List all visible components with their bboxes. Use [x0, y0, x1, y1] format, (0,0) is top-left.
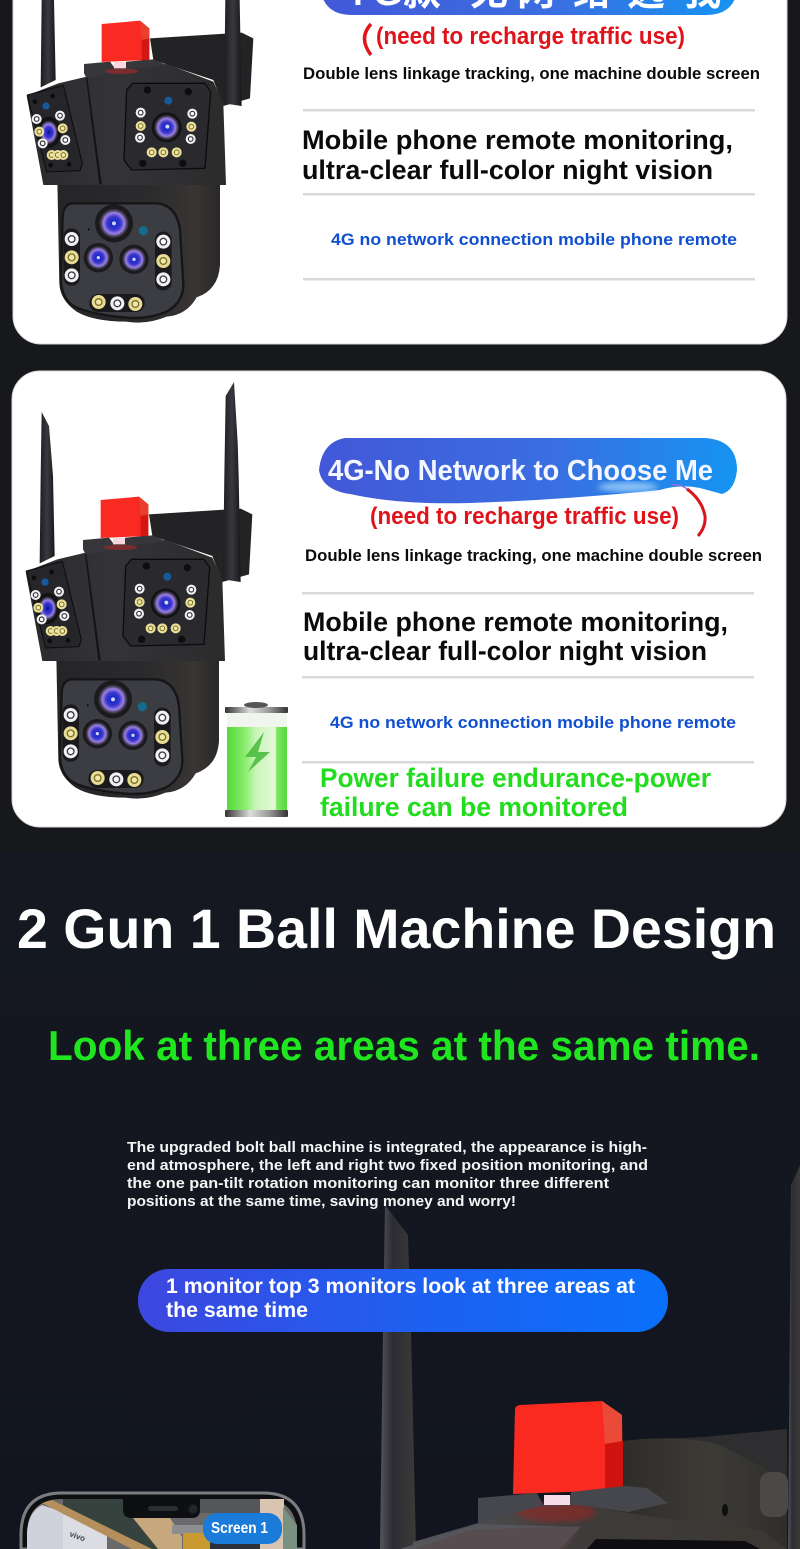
remote monitoring heading — [303, 607, 728, 666]
description paragraph: The upgraded bolt ball machine is integrated, the appearance is high- — [127, 1139, 647, 1156]
4G pill heading: 4G-No Network to Choose Me — [328, 455, 713, 487]
phone mockup — [21, 1493, 304, 1549]
panel: second camera card with battery — [12, 371, 786, 827]
screen label — [203, 1513, 282, 1544]
red note with bracket — [370, 485, 705, 536]
description paragraph: end atmosphere, the left and right two fixed position monitoring, and — [127, 1157, 648, 1174]
remote monitoring heading: Mobile phone remote monitoring, — [302, 125, 733, 155]
tracking caption: Double lens linkage tracking, one machine double screen — [303, 64, 760, 83]
green power failure note: failure can be monitored — [320, 792, 628, 822]
remote monitoring heading: ultra-clear full-color night vision — [303, 636, 707, 666]
tracking caption: Double lens linkage tracking, one machine double screen — [305, 546, 762, 565]
remote monitoring heading: ultra-clear full-color night vision — [302, 155, 713, 185]
camera illustration, second card — [26, 382, 252, 799]
green power failure note — [320, 763, 711, 822]
icon: battery — [225, 702, 288, 817]
description paragraph: the one pan-tilt rotation monitoring can monitor three different — [127, 1175, 609, 1192]
description paragraph — [127, 1139, 648, 1210]
description paragraph: positions at the same time, saving money and worry! — [127, 1193, 516, 1210]
red note with bracket: (need to recharge traffic use) — [370, 503, 679, 530]
red note with bracket: (need to recharge traffic use) — [376, 23, 685, 50]
remote monitoring heading: Mobile phone remote monitoring, — [303, 607, 728, 637]
vivo store sign: vivo — [68, 1529, 87, 1543]
camera illustration, top card — [27, 0, 253, 323]
screen label: Screen 1 — [211, 1520, 268, 1537]
4G pill heading — [319, 438, 737, 503]
remote monitoring heading — [302, 125, 733, 185]
large camera close-up — [380, 1165, 800, 1549]
green subtitle: Look at three areas at the same time. — [48, 1022, 760, 1069]
main title: 2 Gun 1 Ball Machine Design — [17, 897, 776, 960]
blue 4G note: 4G no network connection mobile phone remote — [331, 230, 737, 249]
blue callout pill: the same time — [166, 1299, 308, 1322]
panel: first camera card — [13, 0, 787, 344]
blue 4G note: 4G no network connection mobile phone remote — [330, 713, 736, 732]
panel: dark design section — [0, 852, 800, 1549]
green power failure note: Power failure endurance-power — [320, 763, 711, 793]
blue callout pill — [138, 1269, 668, 1332]
blue callout pill: 1 monitor top 3 monitors look at three areas at — [166, 1275, 635, 1298]
